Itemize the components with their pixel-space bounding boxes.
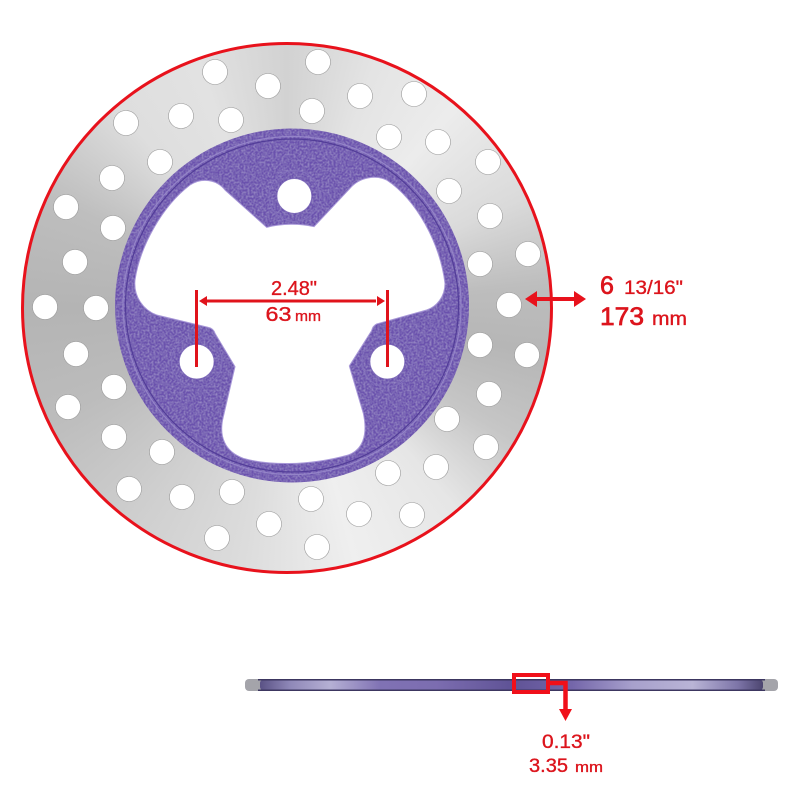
bolt spacing dimension xyxy=(195,278,389,367)
thickness label: 3.35 xyxy=(529,756,568,777)
thickness marker and arrow xyxy=(514,675,572,721)
outer diameter label xyxy=(600,272,687,331)
hole bosses xyxy=(171,171,413,387)
red outer diameter circle xyxy=(22,44,552,572)
bolt spacing inches: 2.48" xyxy=(271,278,317,300)
outer diameter label: 173 xyxy=(600,303,644,331)
bolt spacing millimetres: 63 xyxy=(266,304,292,326)
mounting holes xyxy=(179,179,405,379)
hub cutout xyxy=(135,171,445,464)
thickness label: mm xyxy=(575,759,603,776)
outer diameter arrow xyxy=(525,291,586,307)
side view of disc xyxy=(245,679,778,691)
thickness label: 0.13" xyxy=(542,732,590,753)
purple hub xyxy=(115,128,469,482)
outer diameter label: 13/16" xyxy=(624,278,683,299)
thickness label xyxy=(529,732,603,777)
bolt spacing mm unit: mm xyxy=(295,308,321,325)
outer diameter label: mm xyxy=(652,309,687,330)
brake disc steel surface xyxy=(22,43,552,573)
ventilation holes xyxy=(32,50,540,560)
outer diameter label: 6 xyxy=(600,272,614,300)
